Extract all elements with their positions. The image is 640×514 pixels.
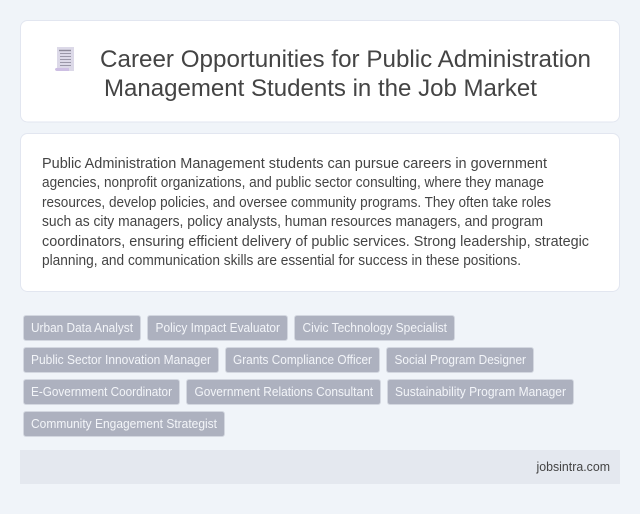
description text: such as city managers, policy analysts, human resources managers, and program — [42, 213, 543, 230]
footer source label: jobsintra.com — [536, 459, 610, 474]
description text: resources, develop policies, and oversee community programs. They often take roles — [42, 194, 551, 211]
icon: document scroll — [55, 47, 74, 71]
description text: agencies, nonprofit organizations, and public sector consulting, where they manage — [42, 174, 544, 191]
tag: Government Relations Consultant — [186, 380, 380, 404]
tag: Sustainability Program Manager — [388, 380, 574, 404]
tag: Policy Impact Evaluator — [148, 316, 288, 340]
description text: Public Administration Management students can pursue careers in government — [42, 155, 548, 172]
tag: Community Engagement Strategist — [24, 412, 224, 436]
tag: Urban Data Analyst — [24, 316, 140, 340]
tag: Social Program Designer: Social Program Designer — [394, 352, 527, 367]
description panel — [20, 134, 620, 292]
footer bar — [20, 450, 620, 484]
tag: Government Relations Consultant: Government Relations Consultant — [194, 384, 373, 399]
tag: Public Sector Innovation Manager: Public Sector Innovation Manager — [31, 352, 212, 367]
tag: Policy Impact Evaluator: Policy Impact Evaluator — [156, 320, 281, 335]
header panel — [20, 20, 620, 122]
tag: Sustainability Program Manager: Sustainability Program Manager — [395, 384, 567, 399]
tag: Public Sector Innovation Manager — [24, 348, 218, 372]
description text: planning, and communication skills are essential for success in these positions. — [42, 252, 521, 269]
tag: Urban Data Analyst: Urban Data Analyst — [31, 320, 133, 335]
tag: Community Engagement Strategist: Community Engagement Strategist — [31, 416, 217, 431]
title: Management Students in the Job Market — [104, 75, 537, 102]
tag: E-Government Coordinator: E-Government Coordinator — [31, 384, 173, 399]
tag: Grants Compliance Officer: Grants Compliance Officer — [233, 352, 373, 367]
title: Career Opportunities for Public Administration — [100, 46, 591, 73]
tag list — [24, 316, 574, 436]
tag: Grants Compliance Officer — [226, 348, 380, 372]
tag: Social Program Designer — [386, 348, 534, 372]
tag: Civic Technology Specialist: Civic Technology Specialist — [302, 320, 447, 335]
description text — [42, 155, 589, 269]
tag: E-Government Coordinator — [24, 380, 180, 404]
tag: Civic Technology Specialist — [294, 316, 454, 340]
description text: coordinators, ensuring efficient delivery of public services. Strong leadership, strategic — [42, 233, 589, 250]
title — [100, 46, 591, 102]
